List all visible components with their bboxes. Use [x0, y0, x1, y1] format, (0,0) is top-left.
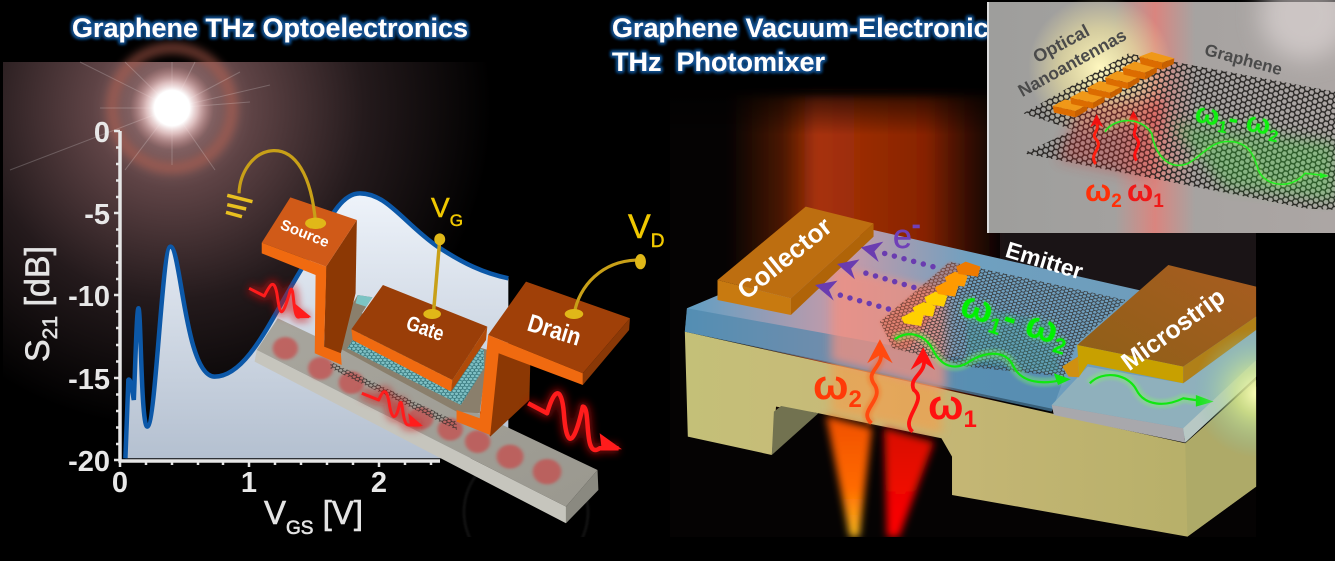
electrode labels: Emitter	[1003, 236, 1086, 284]
right lens flare	[1190, 325, 1256, 460]
difference frequency label: 1	[985, 313, 1004, 340]
inset difference frequency label: - ω	[1226, 103, 1273, 142]
inset omega labels: ω	[1127, 173, 1153, 208]
optical nanoantennas	[901, 262, 980, 326]
voltage labels	[431, 192, 664, 252]
inset labels: Optical	[1030, 21, 1093, 67]
faint lens ring	[464, 450, 588, 561]
omega labels: 1	[963, 406, 977, 433]
inset labels: Graphene	[1203, 40, 1284, 79]
y axis title: S	[19, 339, 57, 362]
device: graphene transistor	[226, 151, 664, 523]
voltage labels: V	[628, 208, 651, 246]
difference frequency label: 2	[1050, 332, 1069, 360]
y axis title: 21	[39, 316, 62, 339]
inset omega labels: ω	[1085, 173, 1111, 208]
device substrate	[685, 332, 1256, 537]
omega labels: ω	[928, 381, 963, 428]
electrode labels: Gate	[403, 312, 447, 346]
inset omega labels	[1085, 173, 1164, 212]
incoming optical beams	[0, 416, 1335, 561]
electron label: -	[912, 209, 921, 239]
inset nanoantennas	[1053, 52, 1174, 117]
omega labels: 2	[848, 386, 862, 413]
x axis title: [V]	[313, 494, 363, 531]
difference frequency label: ω	[956, 283, 999, 333]
graphene sheets	[1023, 53, 1335, 210]
y axis numbers: -5	[84, 199, 110, 231]
electron label: e	[893, 218, 912, 256]
voltage labels: D	[651, 231, 664, 252]
blue S21 curve	[125, 193, 508, 458]
inset difference frequency label: 2	[1267, 126, 1280, 146]
drain electrode	[457, 282, 630, 437]
electrode labels: Collector	[731, 211, 838, 305]
inset background	[987, 0, 1335, 233]
inset omega labels: 1	[1153, 191, 1164, 212]
gate electrode	[351, 285, 487, 392]
THz pulse arrows	[249, 284, 622, 450]
x axis title: GS	[286, 518, 313, 539]
electrode labels: Drain	[524, 308, 585, 351]
source electrode	[262, 197, 357, 365]
y axis numbers: -15	[68, 364, 110, 396]
graphene channel	[330, 295, 488, 430]
inset labels: Nanoantennas	[1015, 25, 1130, 101]
red pulse glow	[249, 284, 619, 450]
voltage labels: V	[431, 192, 450, 223]
inset difference frequency label: 1	[1216, 117, 1229, 137]
microstrip pad and contact	[1052, 330, 1256, 443]
red beam background	[670, 90, 1256, 537]
red pulse lines	[249, 284, 619, 450]
red pulse arrowheads	[295, 303, 622, 449]
title: Graphene Vacuum-Electronic: Graphene Vacuum-Electronic	[612, 13, 989, 43]
x axis numbers: 0	[112, 467, 128, 499]
x axis title: V	[264, 494, 286, 531]
electrode labels: Microstrip	[1116, 283, 1230, 376]
panel: inset nanoantennas on graphene	[987, 0, 1335, 233]
inset difference frequency label: ω	[1193, 97, 1222, 133]
y axis title: [dB]	[19, 246, 57, 316]
electrode labels	[278, 216, 585, 351]
gold wires and contacts	[226, 151, 646, 319]
inset omega labels: 2	[1111, 191, 1122, 212]
y axis numbers: -20	[68, 446, 110, 478]
axes and ticks	[114, 131, 440, 467]
green THz wave	[895, 334, 1214, 407]
voltage labels: G	[450, 211, 463, 230]
optical frequency waves	[867, 339, 935, 432]
electrode labels	[731, 211, 1230, 376]
x axis numbers: 1	[241, 467, 257, 499]
electrode labels: Source	[278, 216, 331, 251]
emitter graphene sheet	[880, 262, 1126, 377]
panel background glow	[3, 62, 658, 552]
title: Graphene THz Optoelectronics: Graphene THz Optoelectronics	[72, 13, 468, 43]
chart: S21 versus VGS	[19, 117, 508, 539]
inset waves	[1090, 111, 1329, 184]
y axis numbers: 0	[94, 117, 110, 149]
waveguide bar	[255, 318, 598, 523]
omega labels: ω	[813, 361, 848, 408]
x axis numbers: 2	[371, 467, 387, 499]
title: THz Photomixer: THz Photomixer	[612, 47, 826, 77]
inset labels	[1015, 21, 1284, 101]
collector electrode	[717, 207, 874, 315]
y axis numbers	[68, 117, 110, 478]
filled curve area	[125, 193, 508, 458]
blue dielectric layer	[685, 230, 1256, 437]
lens flare	[10, 48, 270, 170]
difference frequency label: - ω	[998, 296, 1063, 352]
y axis title	[19, 246, 62, 362]
omega labels	[813, 361, 977, 433]
x axis numbers	[112, 467, 387, 499]
electron emission arrows	[815, 242, 933, 309]
microstrip electrode	[1062, 265, 1256, 383]
y axis numbers: -10	[68, 281, 110, 313]
